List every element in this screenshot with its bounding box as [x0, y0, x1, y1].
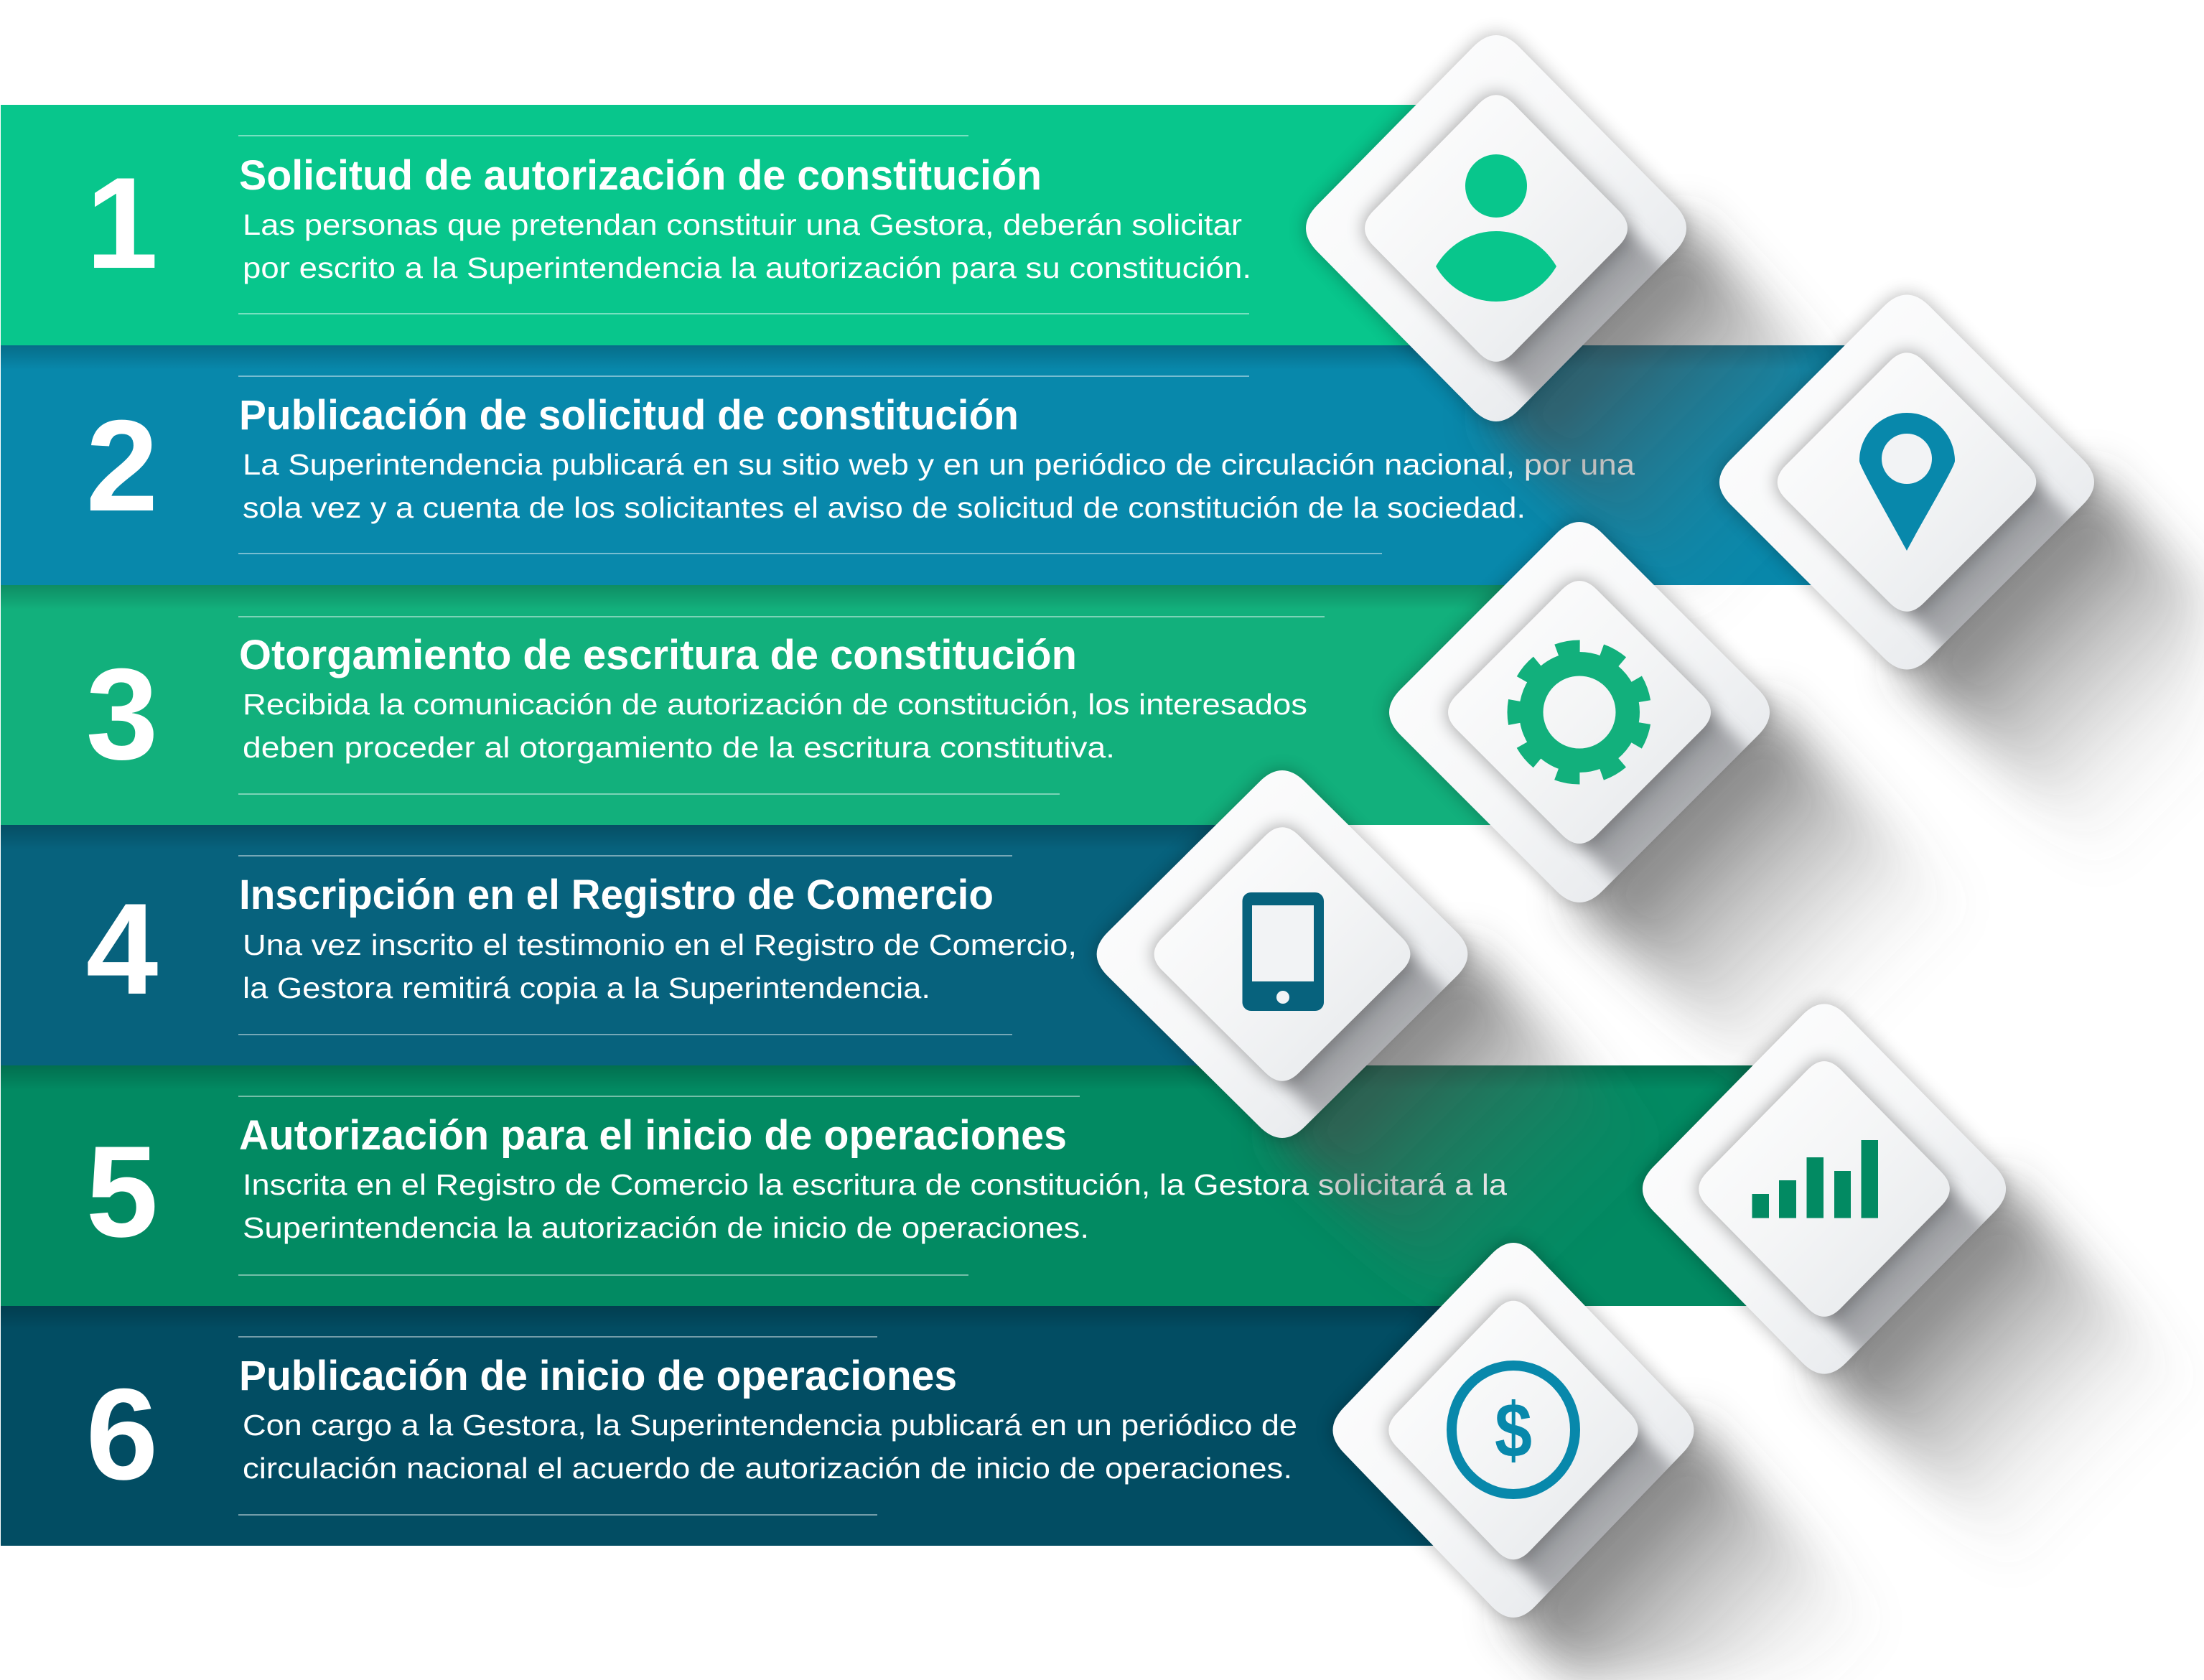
step 3 text [86, 617, 1325, 794]
heading 1: Solicitud de autorización de constitución [239, 152, 1042, 199]
icon: bar chart [1752, 1140, 1878, 1218]
icon: map pin [1859, 413, 1955, 551]
body 1 [243, 208, 1251, 284]
diamond 4 [1097, 770, 1492, 1162]
body 5: Inscrita en el Registro de Comercio la escritura de constitución, la Gestora solicitará a la [243, 1168, 1507, 1201]
body 3 [243, 688, 1307, 764]
step 2 text [86, 376, 1635, 554]
icon: person [1436, 154, 1556, 302]
step 1 text [86, 136, 1251, 314]
band 5 [1, 1065, 1828, 1306]
body 2: La Superintendencia publicará en su sitio web y en un periódico de circulación nacional, por una [243, 448, 1635, 481]
diamond 3 [1389, 522, 1795, 928]
body 2: sola vez y a cuenta de los solicitantes el aviso de solicitud de constitución de la sociedad. [243, 491, 1526, 524]
body 6: Con cargo a la Gestora, la Superintendencia publicará en un periódico de [243, 1409, 1297, 1442]
heading 2: Publicación de solicitud de constitución [239, 392, 1019, 439]
number 5: 5 [86, 1119, 158, 1264]
band 6 [1, 1306, 1516, 1546]
diamond 5 [1643, 1004, 2030, 1399]
body 3: deben proceder al otorgamiento de la escritura constitutiva. [243, 731, 1115, 764]
body 6 [243, 1409, 1297, 1485]
body 4 [243, 928, 1077, 1004]
long diagonal shadows [1274, 220, 2204, 1680]
body 2 [243, 448, 1635, 524]
band 3 [1, 585, 1584, 825]
body 1: Las personas que pretendan constituir una Gestora, deberán solicitar [243, 208, 1242, 241]
body 3: Recibida la comunicación de autorización de constitución, los interesados [243, 688, 1307, 721]
diamond 6 [1333, 1243, 1718, 1643]
band 1 [1, 105, 1501, 345]
number 2: 2 [86, 393, 158, 538]
icon: dollar coin: $ [1495, 1386, 1532, 1473]
body 5: Superintendencia la autorización de inicio de operaciones. [243, 1211, 1089, 1244]
body 6: circulación nacional el acuerdo de autorización de inicio de operaciones. [243, 1452, 1292, 1485]
number 3: 3 [86, 642, 158, 787]
number 4: 4 [86, 877, 158, 1022]
icon: gear [1503, 636, 1656, 788]
icon: dollar coin [1452, 1366, 1575, 1494]
body 5 [243, 1168, 1507, 1244]
diamond 1 [1306, 35, 1712, 447]
heading 6: Publicación de inicio de operaciones [239, 1353, 957, 1399]
heading 5: Autorización para el inicio de operaciones [239, 1112, 1067, 1159]
body 1: por escrito a la Superintendencia la autorización para su constitución. [243, 251, 1251, 284]
step 5 text [86, 1096, 1507, 1275]
step 6 text [86, 1337, 1297, 1515]
diamond 2 [1719, 294, 2119, 694]
heading 3: Otorgamiento de escritura de constitución [239, 632, 1077, 678]
number 1: 1 [86, 151, 158, 296]
number 6: 6 [86, 1362, 158, 1507]
body 4: Una vez inscrito el testimonio en el Registro de Comercio, [243, 928, 1077, 961]
heading 4: Inscripción en el Registro de Comercio [239, 872, 994, 918]
band 4 [1, 825, 1286, 1065]
body 4: la Gestora remitirá copia a la Superintendencia. [243, 971, 930, 1004]
icon: tablet [1242, 892, 1324, 1011]
band 2 [1, 345, 1910, 585]
step 4 text [86, 856, 1077, 1035]
